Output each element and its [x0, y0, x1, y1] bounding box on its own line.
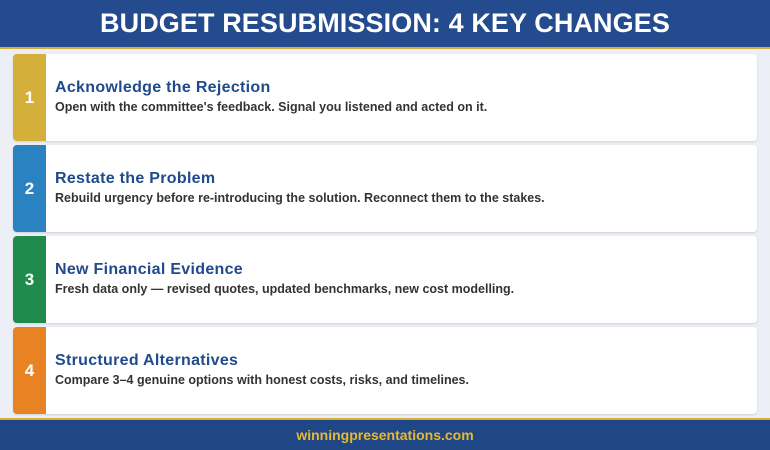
card 4 [13, 327, 757, 414]
number 3 [13, 236, 46, 323]
number 4: 4 [25, 360, 34, 380]
card 1 [13, 54, 757, 141]
text 2: Rebuild urgency before re-introducing the solution. Reconnect them to the stakes. [55, 191, 545, 205]
number 2: 2 [25, 178, 34, 198]
title [0, 0, 770, 49]
number 2 [13, 145, 46, 232]
text 4: Compare 3–4 genuine options with honest costs, risks, and timelines. [55, 373, 469, 387]
heading 1: Acknowledge the Rejection [55, 79, 271, 96]
heading 3: New Financial Evidence [55, 261, 243, 278]
heading 2: Restate the Problem [55, 170, 215, 187]
text 1: Open with the committee's feedback. Signal you listened and acted on it. [55, 100, 487, 114]
title: BUDGET RESUBMISSION: 4 KEY CHANGES [100, 8, 670, 38]
card 3 [13, 236, 757, 323]
card 2 [13, 145, 757, 232]
footer: winningpresentations.com [296, 427, 474, 443]
number 1: 1 [25, 88, 34, 106]
heading 4: Structured Alternatives [55, 352, 238, 369]
number 4 [13, 327, 46, 414]
footer [0, 418, 770, 450]
number 1 [13, 54, 46, 141]
text 3: Fresh data only — revised quotes, updated benchmarks, new cost modelling. [55, 282, 514, 296]
number 3: 3 [25, 270, 34, 288]
